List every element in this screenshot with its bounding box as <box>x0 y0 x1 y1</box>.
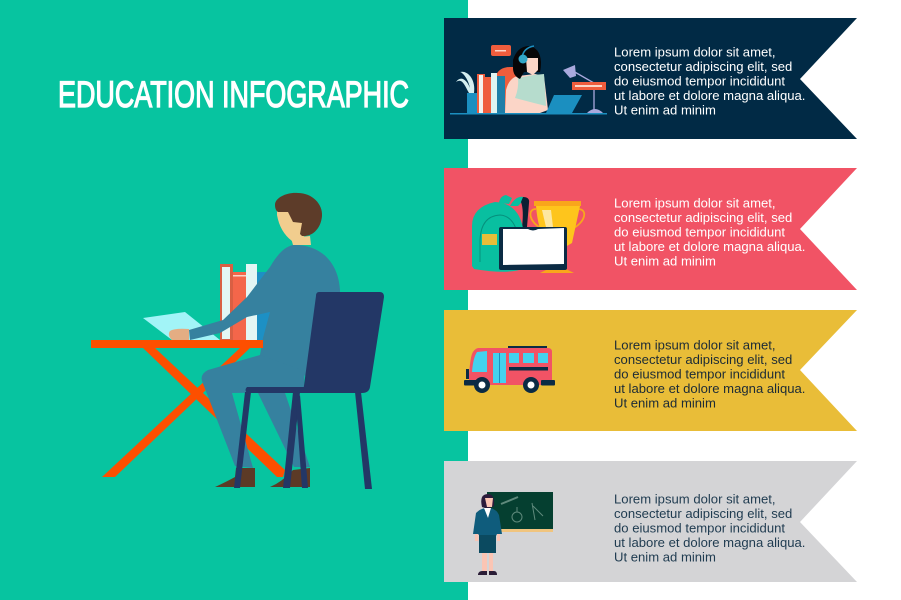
icon: bus <box>464 346 555 393</box>
icon: open book <box>499 227 567 270</box>
headset <box>522 46 534 58</box>
woman hair <box>513 46 541 79</box>
speech bubble <box>491 45 511 56</box>
icon: trophy <box>530 201 584 273</box>
laptop <box>546 95 582 113</box>
text block 3: do eiusmod tempor incididunt <box>614 366 785 382</box>
icon: teacher at chalkboard <box>473 492 553 575</box>
text block 2: Ut enim ad minim <box>614 254 716 268</box>
text block 4: consectetur adipiscing elit, sed <box>614 506 792 521</box>
text block 3: Lorem ipsum dolor sit amet, <box>614 338 776 352</box>
text block 3: ut labore et dolore magna aliqua. <box>614 381 805 396</box>
near leg <box>202 345 305 468</box>
title: EDUCATION INFOGRAPHIC <box>58 74 409 115</box>
lamp <box>563 65 603 113</box>
books on desk <box>220 264 270 340</box>
illustration: student at desk <box>91 193 384 489</box>
text block 4: ut labore et dolore magna aliqua. <box>614 535 805 550</box>
text block 1: Lorem ipsum dolor sit amet, <box>614 44 776 60</box>
shoes <box>215 468 310 487</box>
text block 3: Ut enim ad minim <box>614 396 716 410</box>
face <box>526 58 538 75</box>
icon: woman at laptop <box>450 45 607 114</box>
text block 2: consectetur adipiscing elit, sed <box>614 210 792 225</box>
woman top <box>515 74 546 106</box>
desk top <box>91 340 263 348</box>
ribbon 4 grey <box>444 461 857 582</box>
hair <box>275 193 322 236</box>
text block 1: do eiusmod tempor incididunt <box>614 74 785 88</box>
text block 2: do eiusmod tempor incididunt <box>614 224 785 240</box>
books <box>477 74 485 113</box>
face <box>277 208 306 242</box>
text block 4: Ut enim ad minim <box>614 550 716 564</box>
text block 3: consectetur adipiscing elit, sed <box>614 352 792 367</box>
ribbon 2 pink <box>444 168 857 290</box>
text block 2: ut labore et dolore magna aliqua. <box>614 239 805 254</box>
text block 1: consectetur adipiscing elit, sed <box>614 59 792 74</box>
green background panel <box>0 0 468 600</box>
label tag <box>572 82 606 90</box>
ribbon 1 navy <box>444 18 857 139</box>
torso and arm <box>189 245 340 376</box>
chair <box>234 292 384 489</box>
text block 1: ut labore et dolore magna aliqua. <box>614 88 805 103</box>
icon: backpack <box>472 195 529 272</box>
ribbon 3 yellow <box>444 310 857 431</box>
chair back <box>495 67 518 113</box>
text block 4: do eiusmod tempor incididunt <box>614 520 785 536</box>
text block 2: Lorem ipsum dolor sit amet, <box>614 196 776 210</box>
hand <box>169 329 189 340</box>
neck <box>291 236 311 245</box>
plant <box>456 72 474 93</box>
teacher <box>473 494 502 575</box>
text block 4: Lorem ipsum dolor sit amet, <box>614 492 776 506</box>
desk line <box>450 113 607 114</box>
chalkboard <box>487 492 553 529</box>
woman body skin <box>505 74 548 113</box>
desk legs <box>102 348 285 477</box>
text block 1: Ut enim ad minim <box>614 102 716 118</box>
far leg <box>258 390 310 467</box>
paper sheet <box>143 312 220 340</box>
